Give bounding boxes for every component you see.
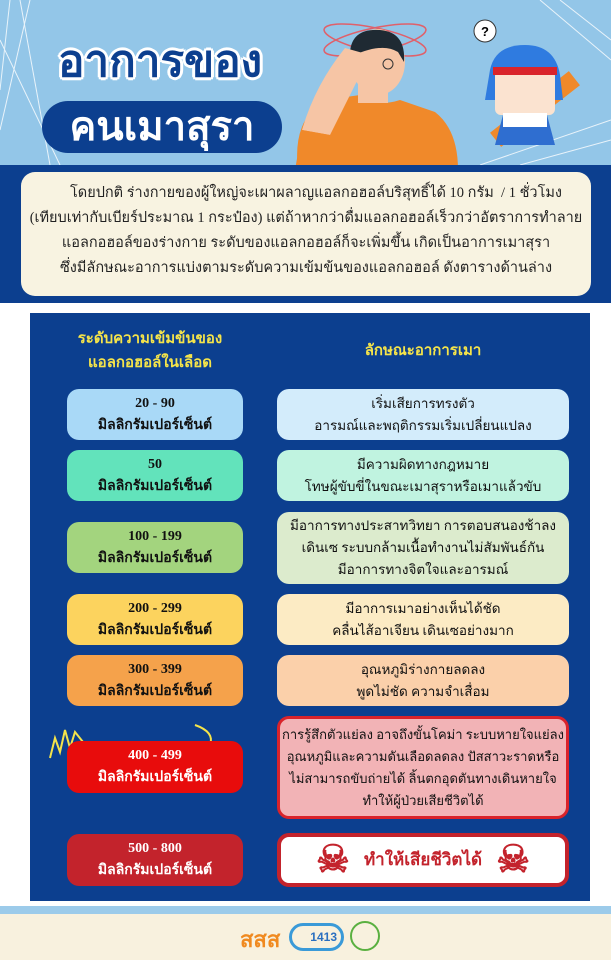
row 3 left: มิลลิกรัมเปอร์เซ็นต์ (98, 550, 212, 566)
intro text box: ซึ่งมีลักษณะอาการแบ่งตามระดับความเข้มข้นของแอลกอฮอล์ ดังตารางด้านล่าง (60, 260, 552, 276)
icon: yellow zigzag accents (49, 724, 212, 758)
column header left (78, 330, 222, 371)
row 6 left (67, 741, 243, 793)
row 5 right: พูดไม่ชัด ความจำเสื่อม (356, 684, 490, 698)
illustration: cartoon girl with ruler (474, 20, 580, 147)
illustration: cartoon girl with ruler: ? (481, 24, 489, 39)
row 1 right (277, 389, 569, 440)
row 1 right: อารมณ์และพฤติกรรมเริ่มเปลี่ยนแปลง (314, 418, 532, 432)
row 5 left: มิลลิกรัมเปอร์เซ็นต์ (98, 684, 212, 698)
row 4 left: 200 - 299 (128, 600, 182, 616)
row 6 right: อุณหภูมิและความดันเลือดลดลง ปัสสาวะราดหรือ (287, 748, 559, 764)
row 1 left: มิลลิกรัมเปอร์เซ็นต์ (98, 418, 212, 432)
row 4 right (277, 594, 569, 645)
row 3 left (67, 522, 243, 573)
row 4 right: คลื่นไส้อาเจียน เดินเซอย่างมาก (332, 622, 514, 638)
intro text box: (เทียบเท่ากับเบียร์ประมาณ 1 กระป๋อง) แต่ถ้าหากว่าดื่มแอลกอฮอล์เร็วกว่าอัตราการทำลาย (30, 210, 582, 226)
row 3 right (277, 512, 569, 584)
row 5 right (277, 655, 569, 706)
row 7 right: ทำให้เสียชีวิตได้ (364, 850, 482, 869)
row 1 left: 20 - 90 (135, 396, 175, 410)
row 2 left (67, 450, 243, 501)
row 1 left (67, 389, 243, 440)
row 4 left (67, 594, 243, 645)
row 5 left: 300 - 399 (128, 662, 182, 676)
row 6 right: ไม่สามารถขับถ่ายได้ ลิ้นตกอุดตันทางเดินหายใจ (289, 770, 557, 786)
intro text box: แอลกอฮอล์ของร่างกาย ระดับของแอลกอฮอล์ก็จะเพิ่มขึ้น เกิดเป็นอาการเมาสุรา (62, 235, 550, 251)
title pill: คนเมาสุรา: คนเมาสุรา (70, 105, 254, 149)
row 5 right: อุณหภูมิร่างกายลดลง (361, 662, 485, 676)
row 2 right: โทษผู้ขับขี่ในขณะเมาสุราหรือเมาแล้วขับ (305, 478, 541, 494)
row 7 left: มิลลิกรัมเปอร์เซ็นต์ (98, 863, 212, 878)
intro text box (21, 172, 591, 296)
row 6 right (277, 716, 569, 819)
row 6 left: มิลลิกรัมเปอร์เซ็นต์ (98, 770, 212, 785)
table panel (30, 313, 590, 901)
footer logos: 1413 (310, 930, 337, 944)
row 2 right: มีความผิดทางกฎหมาย (357, 456, 489, 472)
title pill: คนเมาสุรา (42, 101, 282, 153)
row 1 right: เริ่มเสียการทรงตัว (371, 396, 475, 410)
intro text box: โดยปกติ ร่างกายของผู้ใหญ่จะเผาผลาญแอลกอฮอล์บริสุทธิ์ได้ 10 กรัม / 1 ชั่วโมง (70, 185, 562, 201)
header background (0, 0, 611, 165)
row 6 right: การรู้สึกตัวแย่ลง อาจถึงขั้นโคม่า ระบบหายใจแย่ลง (282, 726, 564, 742)
row 2 right (277, 450, 569, 501)
row 3 right: มีอาการทางประสาทวิทยา การตอบสนองช้าลง (290, 518, 556, 533)
row 7 right (277, 833, 569, 887)
column header left: แอลกอฮอล์ในเลือด (88, 355, 212, 371)
row 3 left: 100 - 199 (128, 528, 182, 544)
footer logos (0, 914, 611, 960)
row 4 left: มิลลิกรัมเปอร์เซ็นต์ (98, 622, 212, 638)
icon: skull: ☠ (316, 839, 350, 881)
title: อาการของ: อาการของ (58, 37, 262, 86)
row 2 left: มิลลิกรัมเปอร์เซ็นต์ (98, 478, 212, 494)
column header left: ระดับความเข้มข้นของ (78, 331, 222, 347)
footer logos: สสส (240, 927, 280, 952)
row 5 left (67, 655, 243, 706)
illustration: dizzy man (296, 23, 458, 165)
row 3 right: มีอาการทางจิตใจและอารมณ์ (338, 562, 508, 577)
row 7 left (67, 834, 243, 886)
footer strip (0, 906, 611, 914)
row 6 left: 400 - 499 (128, 748, 182, 763)
row 7 left: 500 - 800 (128, 841, 182, 856)
row 6 right: ทำให้ผู้ป่วยเสียชีวิตได้ (362, 792, 484, 808)
row 3 right: เดินเซ ระบบกล้ามเนื้อทำงานไม่สัมพันธ์กัน (302, 540, 544, 555)
row 4 right: มีอาการเมาอย่างเห็นได้ชัด (345, 600, 501, 616)
icon: skull right: ☠ (496, 839, 530, 881)
row 2 left: 50 (148, 456, 162, 472)
column header right: ลักษณะอาการเมา (365, 343, 481, 359)
dark blue band (0, 165, 611, 303)
